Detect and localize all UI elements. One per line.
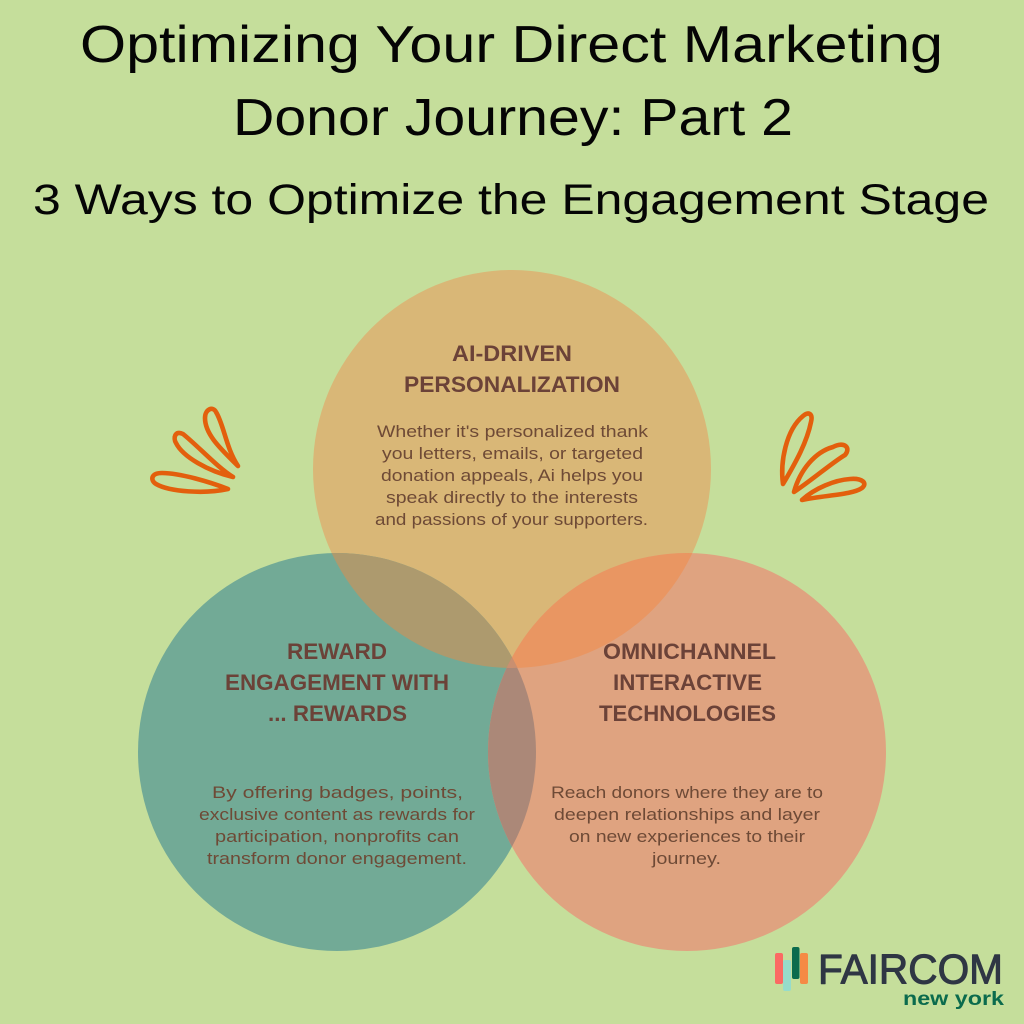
icon: logo bars [775,947,808,991]
heading: omnichannel technologies: TECHNOLOGIES [599,701,776,726]
circle: omnichannel technologies [488,553,886,951]
overlap: top and right [508,553,692,668]
text block: reward engagement [199,639,475,868]
icon: left leaf burst [152,409,238,492]
body: omnichannel technologies [551,783,823,868]
body: AI-driven personalization: Whether it's personalized thank [377,422,649,441]
heading: AI-driven personalization [404,341,620,397]
body: reward engagement [199,783,475,868]
subtitle: 3 Ways to Optimize the Engagement Stage [33,176,989,224]
text block: omnichannel technologies [551,639,823,868]
heading: reward engagement [225,639,449,726]
overlap: left and right [488,658,536,846]
body: omnichannel technologies: on new experiences to their [569,827,805,846]
heading: omnichannel technologies: INTERACTIVE [613,670,762,695]
overlap: all three [507,658,517,668]
logo: Faircom New York [775,946,1005,1010]
icon: right leaf burst [782,414,864,500]
heading: omnichannel technologies: OMNICHANNEL [603,639,776,664]
body: AI-driven personalization: donation appeals, Ai helps you [381,466,643,485]
circle: AI-driven personalization [313,270,711,668]
body: reward engagement: transform donor engagement. [207,849,467,868]
title [80,16,943,147]
body: reward engagement: By offering badges, points, [212,783,463,802]
heading: AI-driven personalization: AI-DRIVEN [452,341,572,366]
overlap: top and left [332,553,512,668]
circle: reward engagement [138,553,536,951]
heading: reward engagement: ENGAGEMENT WITH [225,670,449,695]
heading: omnichannel technologies [599,639,776,726]
logo location: new york [903,989,1005,1010]
logo wordmark: FAIRCOM [818,946,1003,992]
text block: AI-driven personalization [375,341,649,529]
body: AI-driven personalization: and passions of your supporters. [375,510,648,529]
body: omnichannel technologies: journey. [651,849,721,868]
body: AI-driven personalization [375,422,649,529]
body: AI-driven personalization: speak directly to the interests [386,488,638,507]
venn diagram circles [138,270,886,951]
heading: AI-driven personalization: PERSONALIZATION [404,372,620,397]
title: Donor Journey: Part 2 [233,89,793,147]
body: reward engagement: exclusive content as rewards for [199,805,475,824]
heading: reward engagement: REWARD [287,639,387,664]
body: reward engagement: participation, nonprofits can [215,827,459,846]
body: omnichannel technologies: deepen relationships and layer [554,805,820,824]
body: omnichannel technologies: Reach donors where they are to [551,783,823,802]
title: Optimizing Your Direct Marketing [80,16,943,74]
body: AI-driven personalization: you letters, emails, or targeted [382,444,643,463]
heading: reward engagement: ... REWARDS [268,701,407,726]
